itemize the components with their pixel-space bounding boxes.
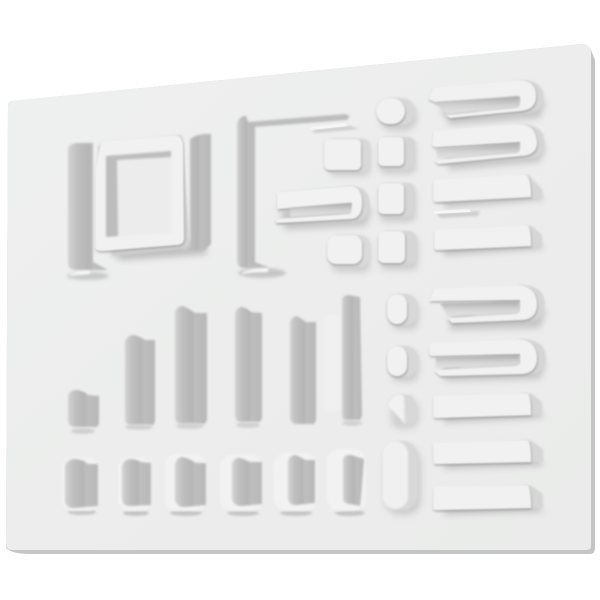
paperclip right 2 <box>432 124 546 170</box>
L-shaped groove <box>237 114 350 278</box>
right groove and shadow of frame <box>110 134 211 260</box>
paperclip lower 1 <box>429 285 546 330</box>
blocks column outer <box>376 98 418 270</box>
bar right 3 <box>433 174 544 208</box>
paperclip lower 2 <box>429 339 546 381</box>
bar chart highlights <box>71 315 362 434</box>
big pill <box>382 441 421 515</box>
small line top <box>311 123 360 133</box>
bottom row grooves <box>65 455 364 508</box>
thin bar <box>434 209 480 218</box>
bar right 4 <box>434 225 544 256</box>
left groove of frame <box>67 143 109 280</box>
bar lower 4 <box>433 440 544 469</box>
bottom row rims <box>62 449 366 511</box>
bottom row shadows <box>68 509 365 516</box>
centre paperclip <box>275 186 372 230</box>
bar lower 5 <box>433 485 544 515</box>
bar lower 3 <box>433 393 544 423</box>
paperclip right 1 <box>428 80 546 125</box>
blocks column inner <box>324 139 370 272</box>
dots column <box>387 294 419 429</box>
square frame <box>95 135 190 256</box>
bar chart grooves <box>68 295 362 427</box>
